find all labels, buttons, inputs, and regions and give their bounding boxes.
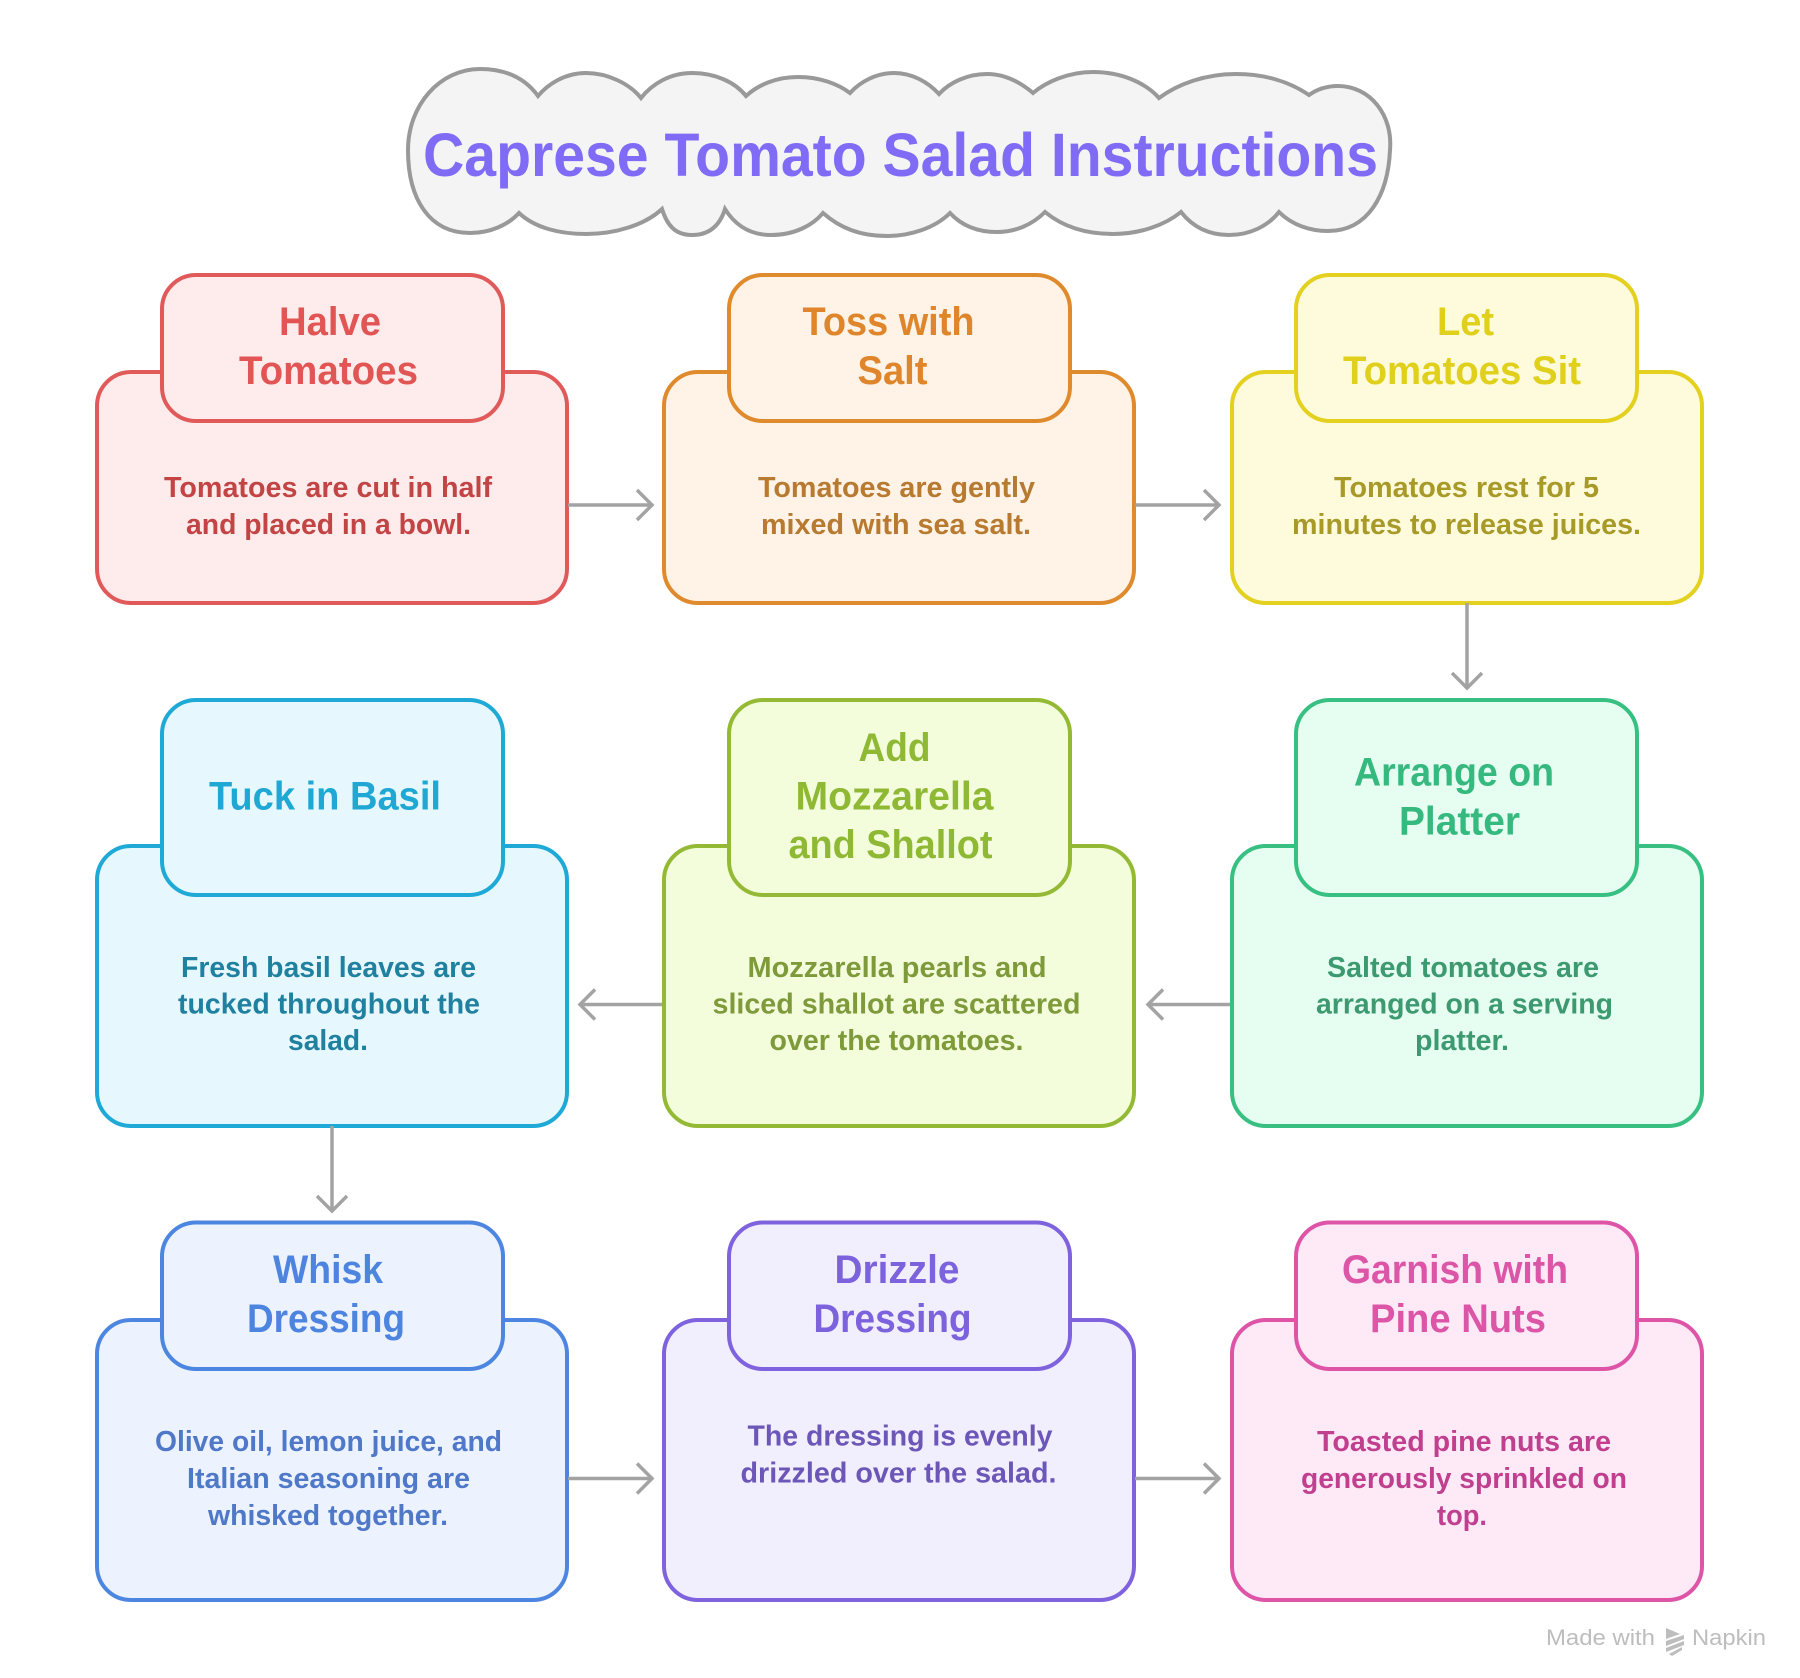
card: Halve Tomatoes: Tomatoes are cut in half	[164, 472, 492, 504]
arrow: Toss to Let Sit	[1135, 490, 1219, 520]
card: Let Tomatoes Sit: minutes to release juices.	[1292, 509, 1641, 541]
card: Add Mozzarella and Shallot	[664, 700, 1134, 1126]
card: Halve Tomatoes: and placed in a bowl.	[186, 509, 471, 541]
card: Garnish with Pine Nuts	[1232, 1222, 1702, 1600]
arrow: Add Mozzarella to Tuck	[580, 990, 664, 1020]
card: Garnish with Pine Nuts: top.	[1437, 1500, 1487, 1532]
card: Add Mozzarella and Shallot: sliced shallot are scattered	[712, 988, 1080, 1020]
card: Toss with Salt: Salt	[858, 349, 928, 393]
card: Drizzle Dressing: Dressing	[814, 1297, 972, 1341]
footer: Made with Napkin	[1546, 1625, 1766, 1656]
card: Tuck in Basil	[97, 700, 567, 1126]
card: Drizzle Dressing	[664, 1222, 1134, 1600]
arrow: Arrange to Add Mozzarella	[1148, 990, 1232, 1020]
card: Garnish with Pine Nuts: Pine Nuts	[1370, 1297, 1546, 1341]
card: Let Tomatoes Sit: Let	[1437, 300, 1494, 344]
card: Arrange on Platter: arranged on a serving	[1316, 988, 1613, 1020]
card: Tuck in Basil: tucked throughout the	[178, 988, 480, 1020]
card: Tuck in Basil: Tuck in Basil	[209, 774, 441, 818]
card: Halve Tomatoes: Tomatoes	[239, 349, 418, 393]
title cloud	[408, 69, 1390, 236]
card: Halve Tomatoes	[97, 275, 567, 603]
card: Whisk Dressing: Dressing	[247, 1297, 405, 1341]
card: Garnish with Pine Nuts: generously sprinkled on	[1301, 1463, 1627, 1495]
card: Garnish with Pine Nuts: Toasted pine nuts are	[1317, 1426, 1611, 1458]
card: Whisk Dressing: whisked together.	[207, 1500, 448, 1532]
card: Whisk Dressing: Italian seasoning are	[187, 1463, 470, 1495]
arrow: Tuck to Whisk	[317, 1126, 347, 1211]
card: Halve Tomatoes: Halve	[279, 300, 381, 344]
arrow: Halve to Toss	[568, 490, 652, 520]
footer: Made with Napkin: Napkin	[1692, 1625, 1766, 1650]
card: Drizzle Dressing: Drizzle	[834, 1248, 960, 1292]
card: Whisk Dressing: Whisk	[273, 1248, 384, 1292]
card: Drizzle Dressing: The dressing is evenly	[748, 1420, 1052, 1452]
card: Garnish with Pine Nuts: Garnish with	[1342, 1248, 1568, 1292]
card: Arrange on Platter: Arrange on	[1354, 750, 1554, 794]
card: Arrange on Platter: platter.	[1415, 1025, 1509, 1057]
card: Arrange on Platter: Platter	[1399, 800, 1520, 844]
card: Tuck in Basil: salad.	[288, 1025, 368, 1057]
arrow: Let Sit to Arrange	[1452, 603, 1482, 688]
card: Toss with Salt: mixed with sea salt.	[761, 509, 1031, 541]
card: Drizzle Dressing: drizzled over the salad.	[740, 1458, 1056, 1490]
card: Add Mozzarella and Shallot: and Shallot	[788, 823, 992, 867]
card: Add Mozzarella and Shallot: Mozzarella pearls and	[748, 952, 1046, 984]
arrow: Drizzle to Garnish	[1135, 1464, 1219, 1494]
card: Arrange on Platter: Salted tomatoes are	[1327, 952, 1599, 984]
icon: Napkin logo	[1666, 1628, 1684, 1656]
card: Let Tomatoes Sit	[1232, 275, 1702, 603]
card: Arrange on Platter	[1232, 700, 1702, 1126]
title: Caprese Tomato Salad Instructions	[423, 121, 1378, 189]
card: Whisk Dressing: Olive oil, lemon juice, and	[155, 1426, 502, 1458]
card: Add Mozzarella and Shallot: Mozzarella	[796, 774, 994, 818]
card: Toss with Salt: Tomatoes are gently	[758, 472, 1035, 504]
card: Toss with Salt	[664, 275, 1134, 603]
card: Add Mozzarella and Shallot: Add	[858, 726, 930, 770]
card: Whisk Dressing	[97, 1222, 567, 1600]
card: Let Tomatoes Sit: Tomatoes rest for 5	[1334, 472, 1599, 504]
card: Tuck in Basil: Fresh basil leaves are	[181, 952, 476, 984]
footer: Made with Napkin: Made with	[1546, 1625, 1655, 1650]
arrow: Whisk to Drizzle	[568, 1464, 652, 1494]
card: Add Mozzarella and Shallot: over the tomatoes.	[770, 1025, 1024, 1057]
card: Toss with Salt: Toss with	[802, 300, 974, 344]
card: Let Tomatoes Sit: Tomatoes Sit	[1343, 349, 1581, 393]
